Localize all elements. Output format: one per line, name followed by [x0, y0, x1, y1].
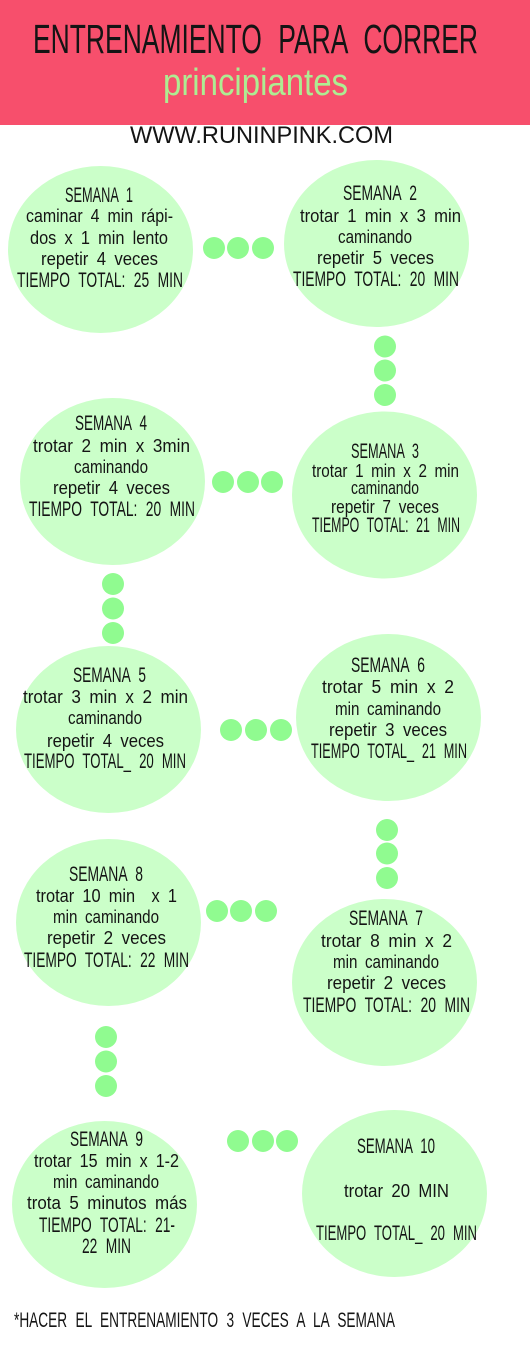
panel: semana 9: SEMANA 9 [70, 1128, 143, 1151]
panel: semana 3 [292, 412, 477, 578]
panel: semana 5: trotar 3 min x 2 min [23, 687, 188, 707]
panel: semana 1: dos x 1 min lento [30, 228, 168, 248]
panel: semana 7: min caminando [333, 952, 439, 972]
connector dots: 1 to 2 [203, 237, 274, 259]
panel: semana 9: TIEMPO TOTAL: 21- [39, 1214, 175, 1237]
panel: semana 10: SEMANA 10 [357, 1135, 435, 1158]
connector dots: 7 to 8 [206, 900, 277, 922]
panel: semana 2: SEMANA 2 [343, 182, 417, 205]
panel: semana 8: trotar 10 min x 1 [36, 886, 177, 906]
panel: semana 10 [302, 1110, 487, 1277]
connector dots: 2 to 3 [374, 336, 396, 406]
connector dots: 6 to 7 [376, 819, 398, 889]
connector dots: 3 to 4 [212, 471, 283, 493]
panel: semana 5: SEMANA 5 [73, 664, 146, 687]
panel: semana 4: repetir 4 veces [53, 478, 170, 498]
panel: semana 7: trotar 8 min x 2 [321, 931, 452, 951]
panel: semana 4: trotar 2 min x 3min [33, 436, 190, 456]
panel: semana 8: TIEMPO TOTAL: 22 MIN [24, 949, 189, 972]
panel: semana 4: TIEMPO TOTAL: 20 MIN [29, 498, 195, 521]
panel: semana 8 [16, 839, 201, 1006]
connector dots: 9 to 10 [227, 1130, 298, 1152]
panel: semana 4: SEMANA 4 [75, 412, 147, 435]
subtitle: principiantes [163, 62, 348, 104]
panel: semana 5: caminando [68, 708, 142, 728]
panel: semana 8: min caminando [53, 907, 159, 927]
panel: semana 1: repetir 4 veces [41, 249, 158, 269]
panel: semana 9: min caminando [53, 1172, 159, 1192]
panel: semana 10: trotar 20 MIN [344, 1181, 449, 1201]
panel: semana 8: repetir 2 veces [47, 928, 166, 948]
panel: semana 1: TIEMPO TOTAL: 25 MIN [17, 269, 183, 292]
panel: semana 1 [8, 166, 193, 333]
panel: semana 7 [292, 899, 477, 1066]
panel: semana 3: trotar 1 min x 2 min [312, 461, 459, 481]
panel: semana 9: trotar 15 min x 1-2 [34, 1151, 179, 1171]
panel: semana 3: caminando [351, 478, 419, 498]
panel: semana 6: min caminando [335, 699, 441, 719]
connector dots: 4 to 5 [102, 573, 124, 644]
panel: semana 2: repetir 5 veces [317, 248, 434, 268]
panel: semana 9: trota 5 minutos más [27, 1193, 187, 1213]
panel: semana 8: SEMANA 8 [69, 863, 143, 886]
panel: semana 2: caminando [338, 227, 412, 247]
panel: semana 5 [16, 646, 201, 813]
panel: semana 9 [12, 1121, 197, 1288]
panel: semana 1: caminar 4 min rápi- [26, 206, 173, 226]
website url: WWW.RUNINPINK.COM [130, 122, 393, 149]
connector dots: 5 to 6 [220, 719, 292, 741]
panel: semana 3: repetir 7 veces [331, 497, 439, 517]
panel: semana 4 [20, 398, 205, 565]
panel: semana 3: SEMANA 3 [351, 440, 419, 463]
panel: semana 1: SEMANA 1 [65, 184, 133, 207]
connector dots: 8 to 9 [95, 1026, 117, 1097]
panel: semana 5: repetir 4 veces [47, 731, 164, 751]
panel: semana 2 [284, 160, 469, 327]
header banner [0, 0, 530, 125]
panel: semana 6: repetir 3 veces [329, 720, 447, 740]
panel: semana 5: TIEMPO TOTAL_ 20 MIN [24, 750, 186, 773]
panel: semana 6 [296, 634, 481, 801]
panel: semana 6: SEMANA 6 [351, 654, 425, 677]
panel: semana 9: 22 MIN [82, 1235, 131, 1258]
panel: semana 7: repetir 2 veces [327, 973, 446, 993]
panel: semana 7: SEMANA 7 [349, 907, 423, 930]
panel: semana 4: caminando [74, 457, 148, 477]
panel: semana 6: trotar 5 min x 2 [322, 677, 454, 697]
panel: semana 2: trotar 1 min x 3 min [300, 206, 461, 226]
